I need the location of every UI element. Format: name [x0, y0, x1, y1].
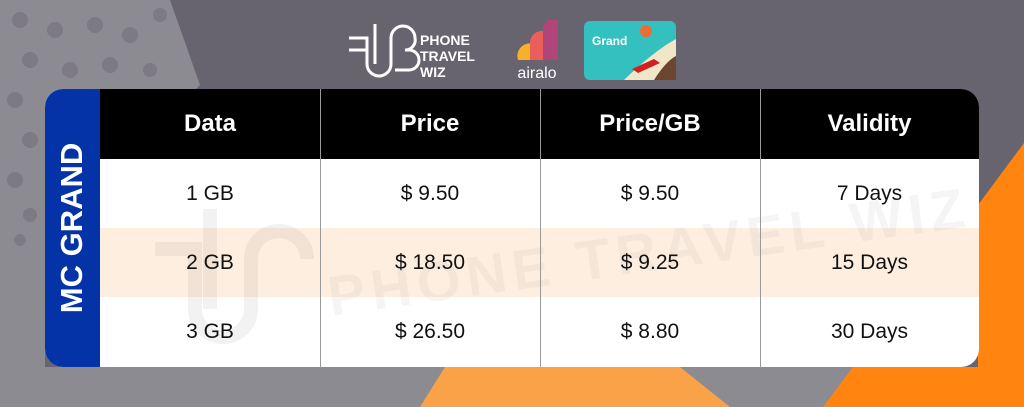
icon: Grand eSIM card: Grand	[592, 34, 627, 48]
row 2: $ 9.25	[621, 250, 679, 274]
icon: airalo logo	[517, 20, 558, 82]
table	[45, 89, 979, 367]
side label: MC GRAND	[45, 89, 100, 367]
row 3: $ 26.50	[395, 320, 465, 343]
icon: Grand eSIM card	[584, 21, 676, 80]
icon: phone travel wiz logo: TRAVEL	[420, 48, 475, 64]
row 3: $ 8.80	[621, 320, 679, 343]
table: Price/GB	[599, 110, 701, 137]
row 1: $ 9.50	[401, 182, 459, 204]
row 2: $ 18.50	[395, 250, 465, 274]
row 3: 3 GB	[186, 320, 234, 343]
icon: phone travel wiz logo	[349, 24, 475, 80]
row 3	[186, 320, 908, 343]
table: Validity	[827, 110, 912, 137]
row 3: 30 Days	[831, 320, 908, 343]
icon: airalo logo: airalo	[517, 65, 557, 82]
header row	[100, 89, 979, 159]
header labels: Data	[184, 110, 236, 137]
row 2: 2 GB	[186, 250, 234, 274]
icon: phone travel wiz logo: WIZ	[420, 64, 446, 80]
icon: phone travel wiz logo: PHONE	[420, 32, 470, 48]
row 1	[186, 182, 902, 204]
watermark: PHONE TRAVEL WIZ	[324, 175, 974, 328]
side label: MC GRAND: MC GRAND	[54, 143, 89, 313]
row 2	[186, 250, 908, 274]
highlighted row	[100, 228, 979, 297]
row 2: 15 Days	[831, 250, 908, 274]
header logos	[349, 20, 676, 82]
row 1: 7 Days	[837, 182, 902, 204]
table: Price	[401, 110, 459, 137]
row 1: 1 GB	[186, 182, 234, 204]
row 1: $ 9.50	[621, 182, 679, 204]
